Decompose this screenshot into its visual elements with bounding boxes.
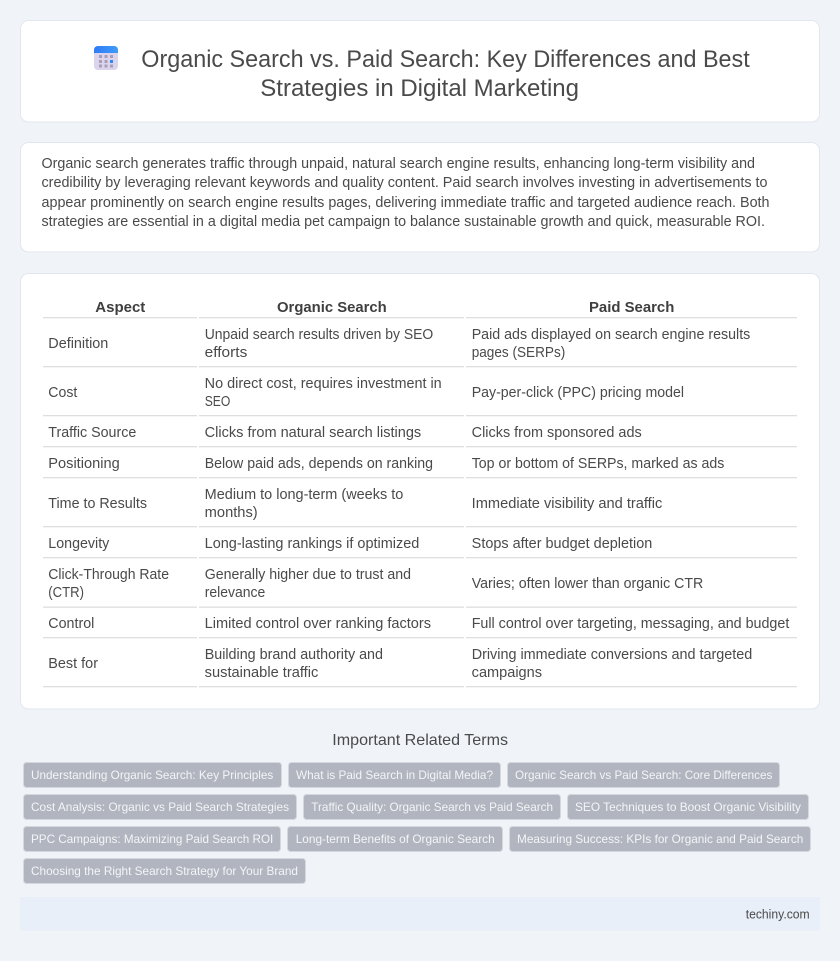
panel: comparison table <box>20 274 820 709</box>
row: positioning: Top or bottom of SERPs, marked as ads <box>472 456 724 472</box>
table header row <box>95 300 674 316</box>
chip: Choosing the Right Search Strategy for Your Brand <box>31 864 298 878</box>
row: cost: No direct cost, requires investment in <box>205 376 442 392</box>
row: control <box>48 616 789 632</box>
chip <box>24 858 306 884</box>
row: best for: Best for <box>48 656 98 672</box>
chip <box>24 826 280 852</box>
row: positioning: Positioning <box>48 456 120 472</box>
row: cost: Cost <box>48 385 77 401</box>
title: Strategies in Digital Marketing <box>260 75 579 102</box>
row: control: Full control over targeting, messaging, and budget <box>472 616 789 632</box>
row: best for: campaigns <box>472 665 542 681</box>
row: time to results: Immediate visibility and traffic <box>472 496 662 512</box>
intro text: appear prominently on search engine results pages, delivering immediate traffic and targeted audience reach. Both <box>42 195 770 211</box>
intro text: Organic search generates traffic through unpaid, natural search engine results, enhancing long-term visibility and <box>42 156 755 172</box>
row: longevity: Longevity <box>48 536 110 552</box>
row: definition: Paid ads displayed on search engine results <box>472 327 750 343</box>
row: time to results <box>48 487 662 521</box>
intro text: strategies are essential in a digital media pet campaign to balance sustainable growth and quick, measurable ROI. <box>42 214 765 230</box>
row: click-through rate: Varies; often lower than organic CTR <box>472 576 703 592</box>
row: traffic source: Clicks from natural search listings <box>205 425 421 441</box>
chip <box>288 826 502 852</box>
row: click-through rate <box>48 567 703 601</box>
chip <box>510 826 810 852</box>
chip <box>24 794 296 820</box>
chip: Traffic Quality: Organic Search vs Paid Search <box>311 800 553 814</box>
row: definition: efforts <box>205 345 247 361</box>
heading: important related terms: Important Related Terms <box>332 732 508 749</box>
row: longevity <box>48 536 652 552</box>
chip <box>508 762 780 788</box>
row: cost: SEO <box>205 394 230 410</box>
row: click-through rate: relevance <box>205 585 265 601</box>
row: longevity: Stops after budget depletion <box>472 536 652 552</box>
table header row: Paid Search <box>589 300 674 316</box>
chip: Long-term Benefits of Organic Search <box>296 832 495 846</box>
row: control: Control <box>48 616 94 632</box>
chip: SEO Techniques to Boost Organic Visibility <box>575 800 801 814</box>
row: time to results: Time to Results <box>48 496 147 512</box>
row: longevity: Long-lasting rankings if optimized <box>205 536 419 552</box>
row: definition: pages (SERPs) <box>472 345 565 361</box>
chip: Cost Analysis: Organic vs Paid Search Strategies <box>31 800 289 814</box>
row: click-through rate: (CTR) <box>48 585 84 601</box>
row: cost: Pay-per-click (PPC) pricing model <box>472 385 684 401</box>
chip: What is Paid Search in Digital Media? <box>296 768 493 782</box>
intro text <box>42 156 770 230</box>
row: traffic source: Traffic Source <box>48 425 136 441</box>
row: definition: Unpaid search results driven by SEO <box>205 327 433 343</box>
chip: Organic Search vs Paid Search: Core Differences <box>515 768 772 782</box>
chip: Understanding Organic Search: Key Principles <box>31 768 273 782</box>
row: positioning: Below paid ads, depends on ranking <box>205 456 433 472</box>
row: definition <box>48 327 750 361</box>
footer bar <box>20 897 820 931</box>
panel: title header <box>20 20 820 122</box>
chip: Measuring Success: KPIs for Organic and Paid Search <box>517 832 803 846</box>
row: click-through rate: Generally higher due to trust and <box>205 567 411 583</box>
title <box>141 46 750 102</box>
chip <box>568 794 808 820</box>
row: definition: Definition <box>48 336 108 352</box>
intro text: credibility by leveraging relevant keywords and quality content. Paid search involves investing in advertisements to <box>42 175 768 191</box>
table header row: Organic Search <box>277 300 387 316</box>
row: traffic source <box>48 425 642 441</box>
row: click-through rate: Click-Through Rate <box>48 567 169 583</box>
footer source: techiny.com <box>746 907 810 921</box>
row: best for <box>48 647 752 681</box>
row: best for: Driving immediate conversions and targeted <box>472 647 752 663</box>
chip <box>24 762 282 788</box>
icon: calendar <box>94 46 118 70</box>
row: best for: Building brand authority and <box>205 647 383 663</box>
row: best for: sustainable traffic <box>205 665 318 681</box>
title: Organic Search vs. Paid Search: Key Differences and Best <box>141 46 750 73</box>
panel: introduction <box>20 142 820 252</box>
chip <box>304 794 560 820</box>
row: traffic source: Clicks from sponsored ads <box>472 425 642 441</box>
chip <box>288 762 500 788</box>
row: time to results: months) <box>205 505 258 521</box>
related terms chips <box>24 762 810 884</box>
table header row: Aspect <box>95 300 146 316</box>
chip: PPC Campaigns: Maximizing Paid Search ROI <box>31 832 273 846</box>
row: cost <box>48 376 684 410</box>
row: positioning <box>48 456 724 472</box>
row: control: Limited control over ranking factors <box>205 616 431 632</box>
row: time to results: Medium to long-term (weeks to <box>205 487 403 503</box>
